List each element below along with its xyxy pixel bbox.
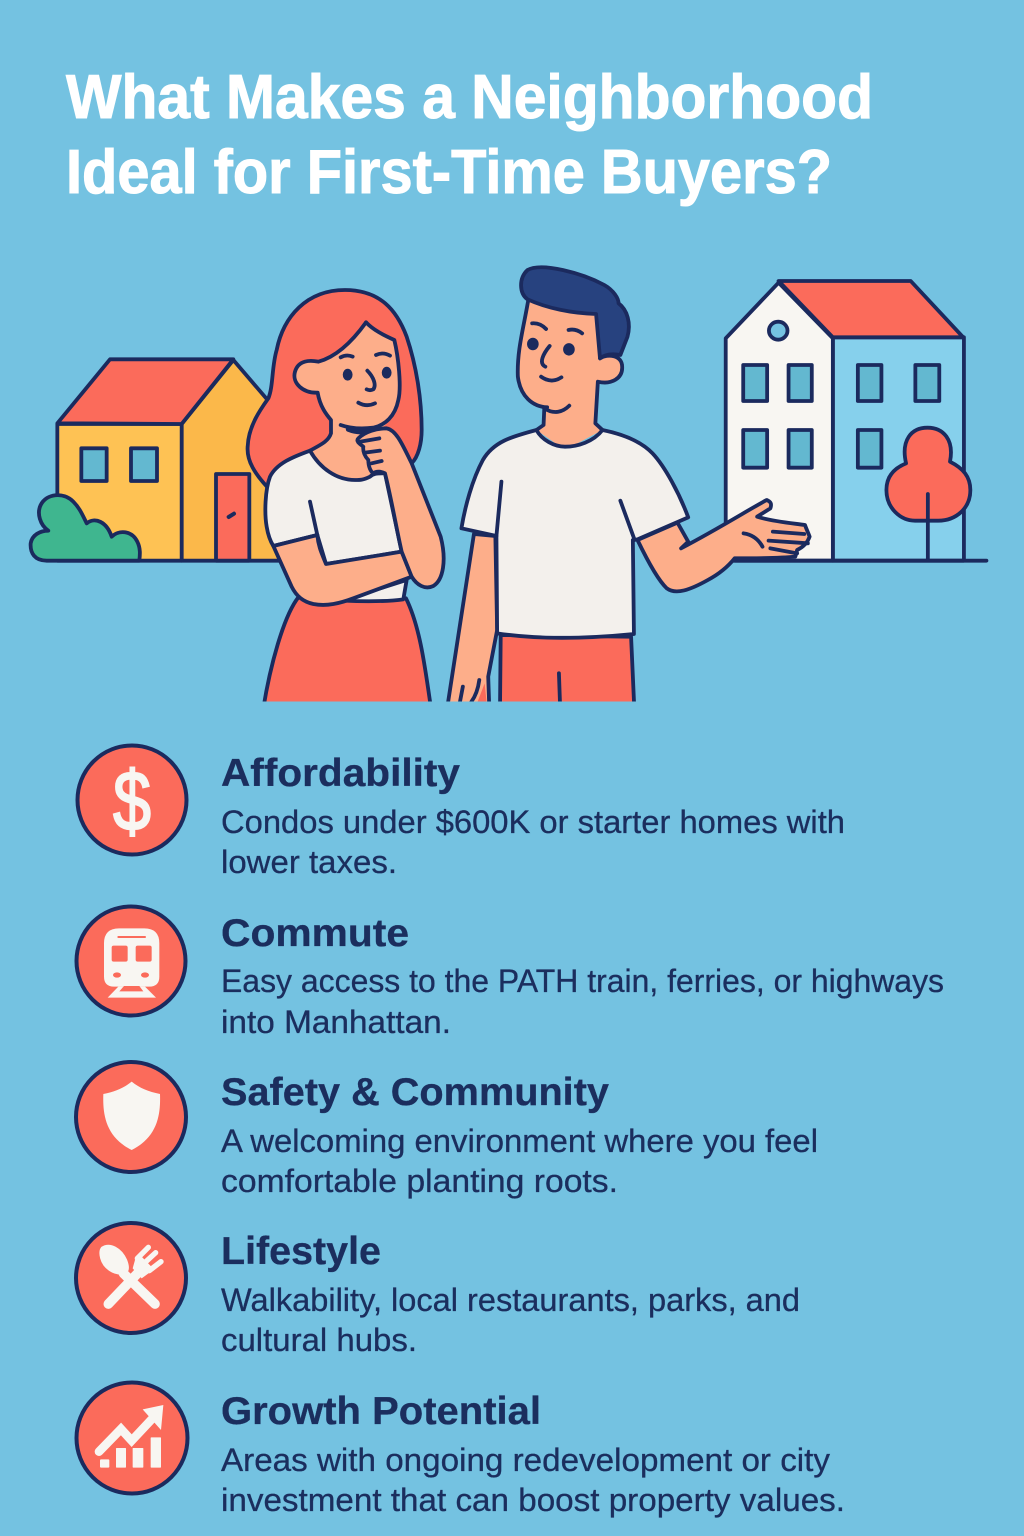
- yellow house: [31, 359, 287, 561]
- lifestyle text: [221, 1282, 800, 1358]
- commute text: Easy access to the PATH train, ferries, or highways: [221, 963, 944, 999]
- growth heading: Growth Potential: [221, 1390, 541, 1433]
- icon: dollar sign: $: [113, 754, 151, 848]
- affordability text: [221, 804, 845, 880]
- title: Ideal for First-Time Buyers?: [66, 138, 832, 207]
- icon: rising chart: [76, 1382, 188, 1494]
- apartment building: [726, 281, 986, 561]
- safety text: A welcoming environment where you feel: [221, 1123, 818, 1159]
- item: commute: [76, 906, 944, 1040]
- title: What Makes a Neighborhood: [66, 63, 873, 132]
- safety text: [221, 1123, 818, 1199]
- illustration: couple and houses: [31, 267, 986, 722]
- affordability text: Condos under $600K or starter homes with: [221, 804, 845, 840]
- lifestyle text: Walkability, local restaurants, parks, and: [221, 1282, 800, 1318]
- growth text: Areas with ongoing redevelopment or city: [221, 1442, 830, 1478]
- title: [66, 63, 873, 207]
- commute text: into Manhattan.: [221, 1004, 451, 1040]
- commute text: [221, 963, 944, 1040]
- lifestyle text: cultural hubs.: [221, 1322, 417, 1358]
- safety heading: Safety & Community: [221, 1071, 609, 1114]
- item: growth potential: [76, 1382, 845, 1518]
- icon: train: [76, 906, 186, 1016]
- item: lifestyle: [76, 1223, 800, 1358]
- lifestyle heading: Lifestyle: [221, 1230, 381, 1273]
- icon: spoon and fork: [76, 1223, 186, 1333]
- safety text: comfortable planting roots.: [221, 1163, 618, 1199]
- affordability text: lower taxes.: [221, 844, 397, 880]
- item: affordability: [78, 746, 845, 880]
- woman: [248, 290, 444, 708]
- man: [447, 267, 810, 708]
- growth text: [221, 1442, 845, 1518]
- icon: dollar sign: [78, 746, 186, 854]
- affordability heading: Affordability: [221, 752, 460, 795]
- item: safety and community: [76, 1062, 818, 1199]
- icon: shield: [76, 1062, 186, 1172]
- commute heading: Commute: [221, 912, 409, 955]
- growth text: investment that can boost property values.: [221, 1482, 845, 1518]
